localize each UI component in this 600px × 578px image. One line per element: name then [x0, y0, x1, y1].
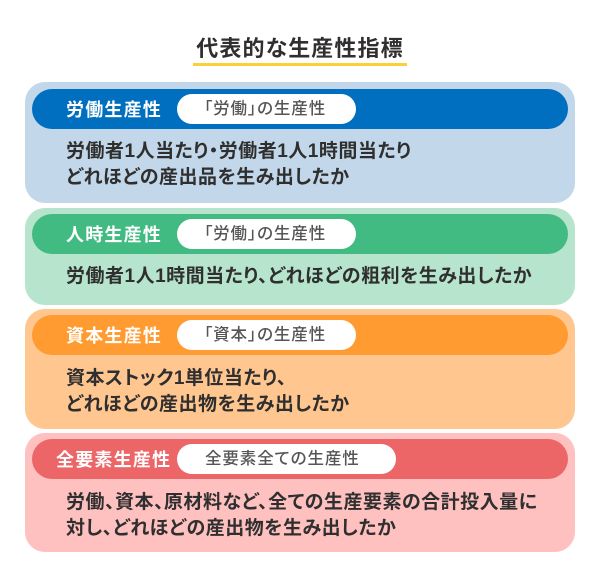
heading: 全要素生産性	[56, 450, 171, 470]
title underline	[193, 63, 407, 66]
title	[193, 36, 407, 66]
header: capital productivity	[32, 315, 568, 355]
pill label	[177, 444, 396, 474]
pill label: 「資本」の生産性	[204, 326, 326, 344]
description	[66, 140, 412, 188]
panel: capital productivity	[25, 309, 575, 429]
header: total factor productivity	[32, 439, 568, 479]
panel: total factor productivity	[25, 433, 575, 552]
description: どれほどの産出物を生み出したか	[66, 394, 350, 415]
panel: man-hour productivity	[25, 208, 575, 305]
pill label	[177, 320, 356, 350]
description: どれほどの産出品を生み出したか	[66, 167, 350, 188]
description: 資本ストック1単位当たり、	[66, 368, 287, 389]
heading: 資本生産性	[66, 326, 162, 346]
heading: 人時生産性	[66, 225, 162, 245]
pill label: 「労働」の生産性	[204, 100, 326, 118]
description: 労働者1人当たり・労働者1人1時間当たり	[66, 141, 412, 162]
description	[66, 368, 350, 415]
header: labor productivity	[32, 89, 568, 129]
pill label: 「労働」の生産性	[204, 225, 326, 243]
description: 労働、資本、原材料など、全ての生産要素の合計投入量に	[66, 492, 538, 513]
description	[66, 492, 538, 539]
pill label	[177, 219, 356, 249]
pill label: 全要素全ての生産性	[205, 450, 360, 468]
heading: 労働生産性	[66, 100, 162, 120]
title text: 代表的な生産性指標	[196, 36, 404, 61]
pill label	[177, 94, 356, 124]
header: man-hour productivity	[32, 214, 568, 254]
description: 労働者1人1時間当たり、どれほどの粗利を生み出したか	[66, 266, 532, 287]
description: 対し、どれほどの産出物を生み出したか	[66, 518, 396, 539]
panel: labor productivity	[25, 82, 575, 203]
